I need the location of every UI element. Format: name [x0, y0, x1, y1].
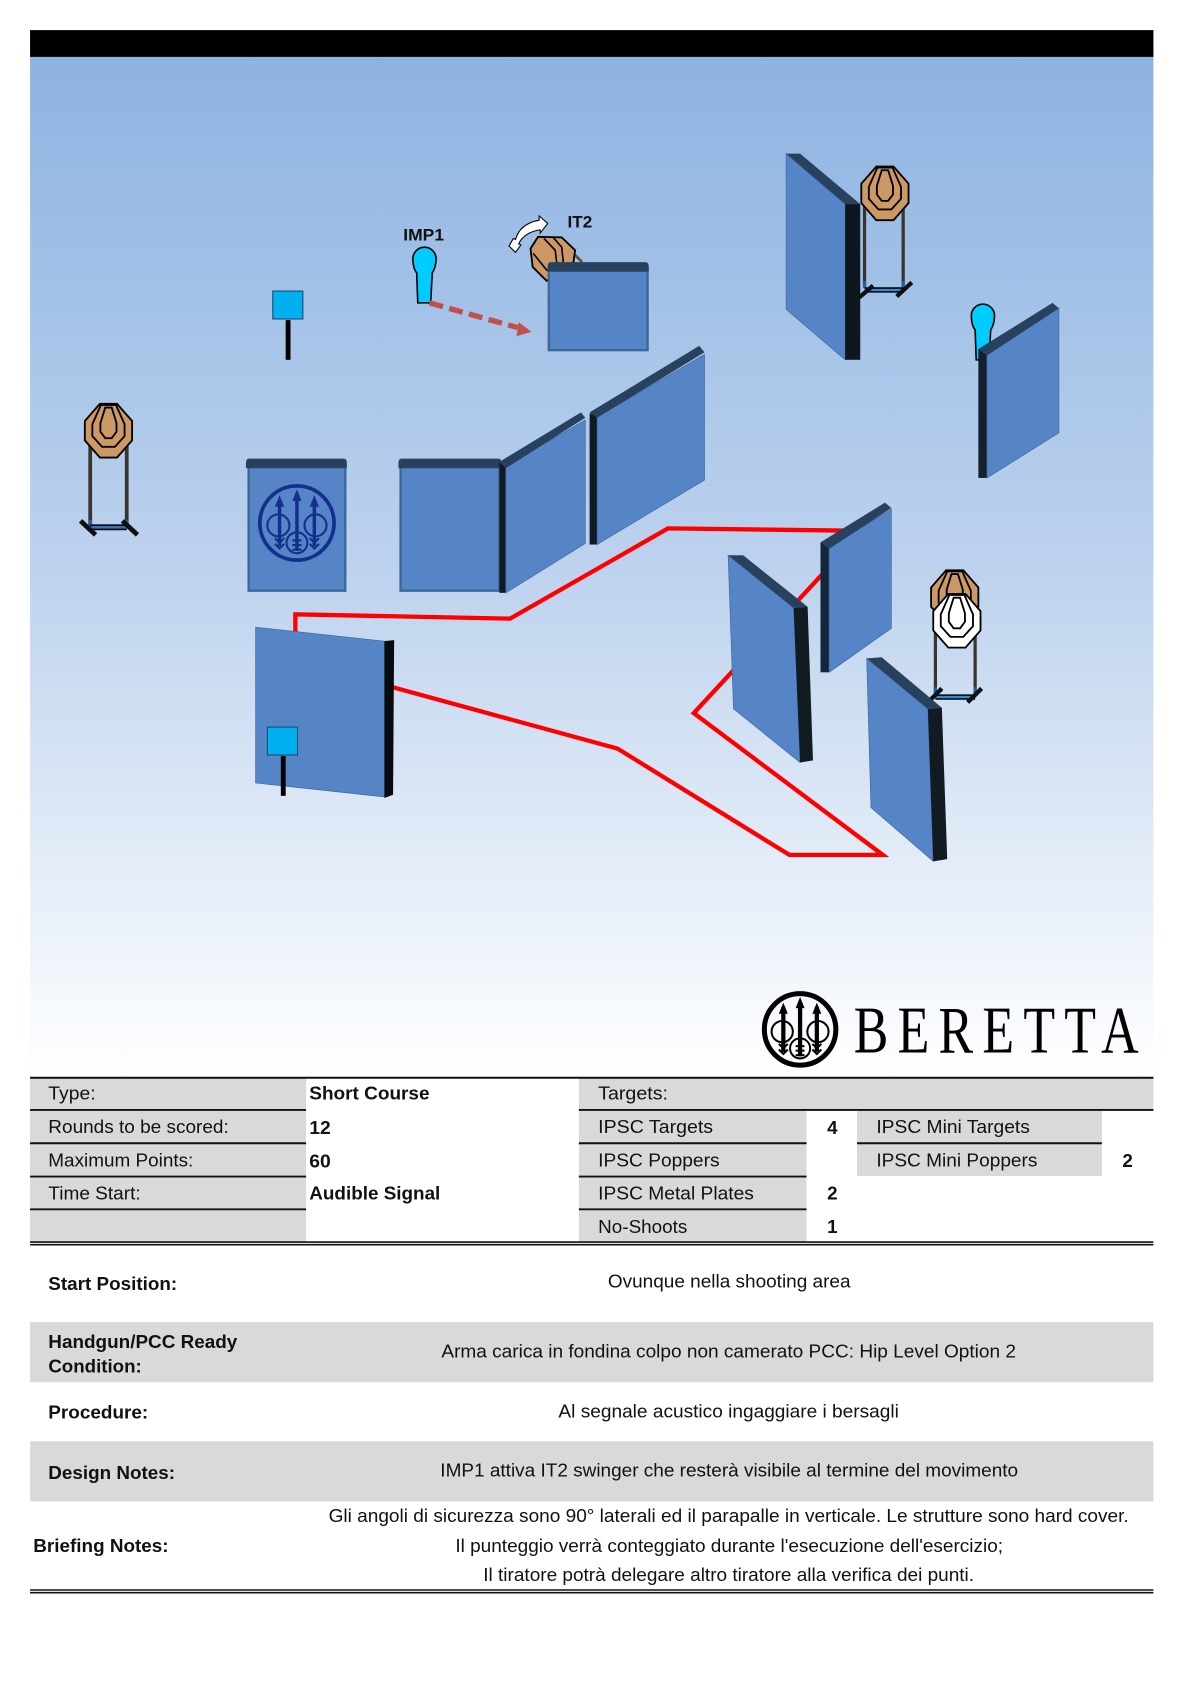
design notes: IMP1 attiva IT2 swinger che resterà visibile al termine del movimento — [440, 1460, 1018, 1481]
right no-shoot popper behind wall — [971, 304, 995, 360]
icon: Beretta trident roundel — [764, 994, 836, 1065]
left column labels: Rounds to be scored: — [48, 1116, 229, 1137]
stage diagram panel — [30, 57, 1153, 1077]
procedure: Procedure: — [48, 1402, 148, 1423]
top right target on stand — [859, 166, 912, 298]
briefing notes: Il punteggio verrà conteggiato durante l'esecuzione dell'esercizio; — [455, 1535, 1003, 1556]
grey cell backgrounds — [30, 1077, 1153, 1242]
popper IMP1 — [413, 247, 436, 303]
foreground left wall — [256, 627, 394, 798]
far right wall — [978, 303, 1059, 478]
target type labels: No-Shoots — [598, 1216, 687, 1237]
stage info table — [30, 1077, 1153, 1245]
ready condition: Arma carica in fondina colpo non camerato PCC: Hip Level Option 2 — [441, 1340, 1016, 1361]
left column labels: Maximum Points: — [48, 1149, 193, 1170]
target counts: 2 — [827, 1183, 838, 1204]
target type labels: IPSC Mini Targets — [876, 1116, 1030, 1137]
left column labels: Type: — [48, 1083, 96, 1104]
long angled wall — [590, 346, 705, 545]
procedure — [48, 1401, 899, 1423]
swing arrow icon — [509, 216, 548, 252]
left column values — [309, 1083, 440, 1204]
briefing notes: Gli angoli di sicurezza sono 90° laterali ed il parapalle in verticale. Le strutture sono hard cover. — [329, 1505, 1129, 1526]
wordmark: BERETTA — [854, 993, 1139, 1067]
Beretta brand logo — [764, 993, 1139, 1067]
target type labels: Targets: — [598, 1083, 668, 1104]
left target on stand — [81, 404, 137, 535]
briefing notes — [33, 1505, 1129, 1585]
design notes — [48, 1460, 1018, 1483]
target type labels: IPSC Targets — [598, 1116, 713, 1137]
wall with Beretta emblem — [246, 459, 347, 591]
ready condition: Condition: — [48, 1356, 142, 1377]
label IMP1: IMP1 — [403, 226, 444, 245]
left column values: Short Course — [309, 1083, 430, 1104]
briefing notes: Briefing Notes: — [33, 1535, 169, 1556]
left column values: 60 — [309, 1150, 331, 1171]
swinger target IT2 — [531, 237, 582, 281]
left column labels: Time Start: — [48, 1183, 141, 1204]
target counts — [827, 1117, 1133, 1237]
no-shoot square on foreground wall — [267, 727, 297, 796]
lower centre wall (front) — [728, 555, 813, 763]
stage description section — [30, 1271, 1153, 1593]
target counts: 1 — [827, 1216, 838, 1237]
no-shoot square, top left — [273, 291, 303, 360]
centre-left wall pair — [398, 412, 585, 593]
left column labels — [48, 1083, 229, 1204]
icon: Beretta emblem on wall — [260, 486, 334, 560]
target type labels: IPSC Metal Plates — [598, 1183, 754, 1204]
ready condition — [48, 1331, 1016, 1377]
lower centre wall (behind) — [820, 503, 891, 672]
dashed activation arrow — [430, 303, 532, 336]
red shooting area boundary — [295, 528, 883, 855]
left column values: 12 — [309, 1117, 331, 1138]
grey bands — [30, 1322, 1153, 1501]
left column values: Audible Signal — [309, 1183, 440, 1204]
sky gradient background — [30, 57, 1153, 1077]
lower right wall — [867, 657, 947, 861]
top right wall — [786, 154, 860, 360]
target type labels: IPSC Poppers — [598, 1149, 720, 1170]
target type labels: IPSC Mini Poppers — [876, 1149, 1037, 1170]
header black bar — [30, 30, 1153, 57]
target counts: 2 — [1122, 1150, 1133, 1171]
design notes: Design Notes: — [48, 1462, 175, 1483]
label IT2: IT2 — [568, 213, 592, 232]
target counts: 4 — [827, 1117, 838, 1138]
paired targets on stand — [928, 570, 982, 702]
start position: Start Position: — [48, 1273, 177, 1294]
procedure: Al segnale acustico ingaggiare i bersagli — [558, 1401, 899, 1422]
start position: Ovunque nella shooting area — [608, 1271, 851, 1292]
target type labels — [598, 1083, 1037, 1237]
ready condition: Handgun/PCC Ready — [48, 1331, 238, 1352]
start position — [48, 1271, 851, 1294]
briefing notes: Il tiratore potrà delegare altro tiratore alla verifica dei punti. — [483, 1564, 974, 1585]
wall covering IT2 — [548, 262, 649, 350]
